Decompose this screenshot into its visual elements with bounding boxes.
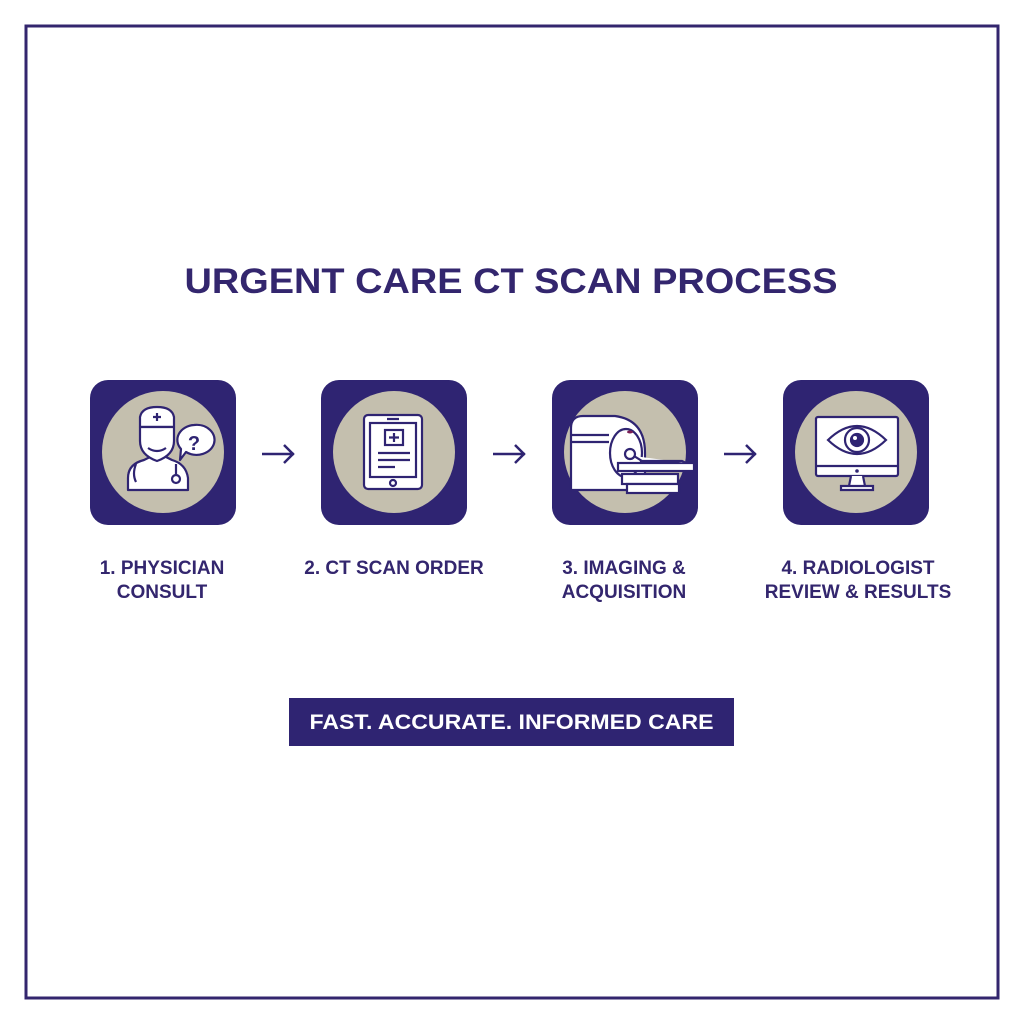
step 2: CT scan order: [321, 380, 467, 525]
tagline banner: FAST. ACCURATE. INFORMED CARE: [310, 711, 714, 734]
tagline banner: [289, 698, 734, 746]
step labels: 4. RADIOLOGIST: [781, 558, 935, 579]
step labels: [100, 558, 951, 603]
step labels: 3. IMAGING &: [562, 558, 686, 579]
step 3: imaging & acquisition: [552, 380, 698, 525]
step labels: CONSULT: [117, 582, 208, 603]
arrow 1: [262, 445, 294, 463]
icon: tablet order: [364, 415, 422, 489]
icon: CT scanner: [571, 416, 694, 493]
arrow 3: [724, 445, 756, 463]
arrow 2: [493, 445, 525, 463]
step labels: ACQUISITION: [562, 582, 686, 603]
step labels: 1. PHYSICIAN: [100, 558, 224, 579]
icon: monitor with eye: [816, 417, 898, 490]
step 1: physician consult: ?: [188, 433, 200, 455]
title: URGENT CARE CT SCAN PROCESS: [184, 262, 838, 301]
step labels: 2. CT SCAN ORDER: [304, 558, 484, 579]
step labels: REVIEW & RESULTS: [765, 582, 951, 603]
icon: physician: [128, 407, 215, 490]
step 1: physician consult: [90, 380, 236, 525]
step 4: radiologist review: [783, 380, 929, 525]
